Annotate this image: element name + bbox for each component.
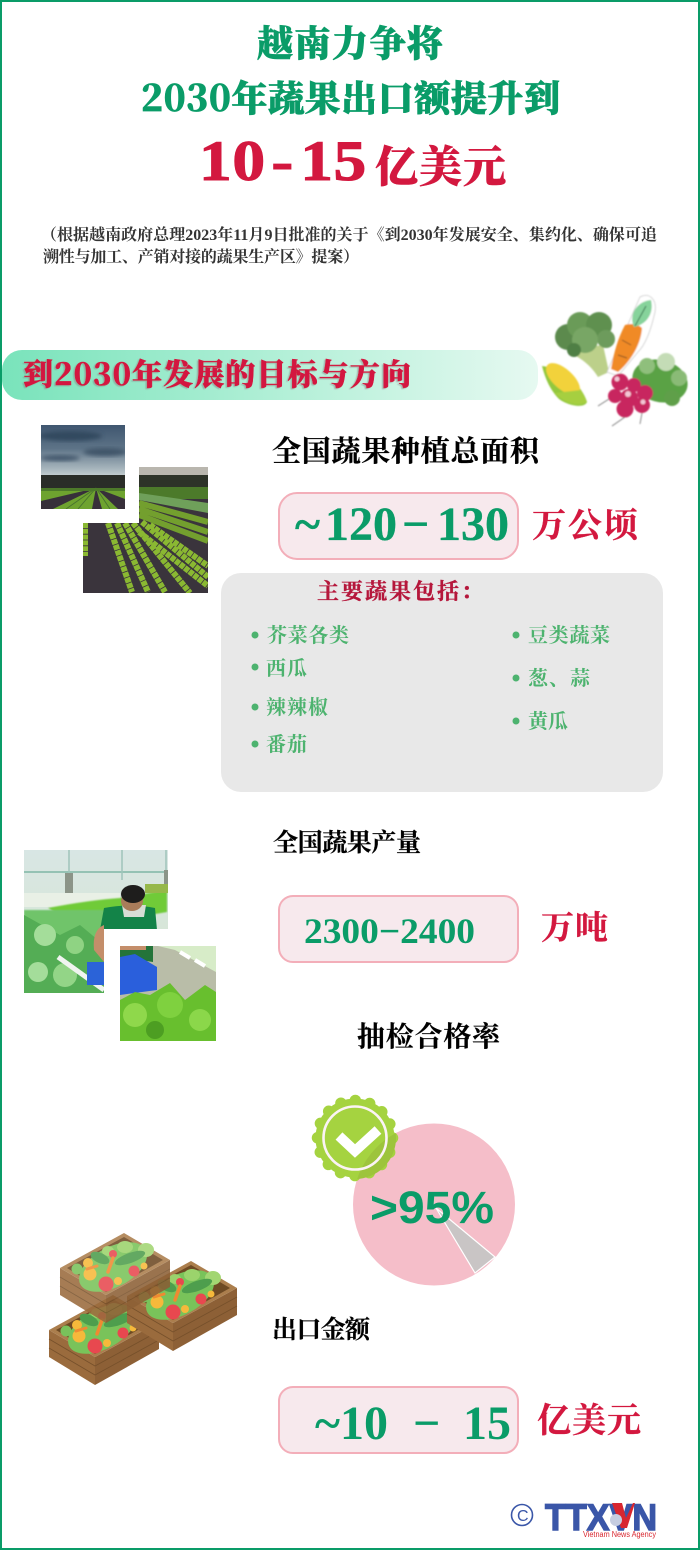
icon: quality badge	[314, 1097, 396, 1179]
heading: total output: 全国蔬果产量	[273, 829, 421, 857]
value box: area	[279, 493, 518, 559]
list: left column: 番茄	[266, 732, 307, 756]
title: 10-15	[199, 130, 366, 193]
logo: TTXVN: TTXVN	[545, 1497, 657, 1538]
list: right column: 葱、蒜	[528, 666, 591, 690]
icon: broccoli	[555, 312, 615, 377]
photo: field with sky	[38, 425, 127, 509]
section banner: 到2030年发展的目标与方向	[23, 350, 411, 394]
title: 越南力争将	[257, 16, 443, 67]
list: right column: 豆类蔬菜	[528, 624, 610, 647]
icon: carrot	[607, 295, 655, 376]
value box: area: 130	[437, 498, 509, 551]
list: right column: 黄瓜	[528, 710, 568, 733]
title	[141, 16, 560, 195]
icon: corn	[541, 358, 587, 406]
heading: export value: 出口金额	[272, 1316, 372, 1344]
icon: radishes	[598, 374, 653, 426]
photo: lettuce and crate	[120, 946, 216, 1041]
logo: TTXVN: C	[517, 1508, 529, 1525]
list: right column	[512, 624, 610, 733]
icon: vegetables	[541, 295, 692, 426]
logo: TTXVN: Vietnam News Agency	[583, 1530, 656, 1539]
source note: 溯性与加工、产销对接的蔬果生产区》提案）	[43, 247, 359, 266]
value box: export: ~10	[315, 1397, 388, 1450]
section banner	[2, 350, 538, 400]
value box: output: 2300−2400	[304, 911, 475, 951]
icon: leafy greens	[628, 353, 692, 409]
icon: produce crates	[49, 1232, 237, 1385]
value box: export: 15	[463, 1397, 511, 1450]
value: >95%	[370, 1182, 494, 1233]
unit: hundred million USD: 亿美元	[537, 1402, 641, 1440]
value box: export	[279, 1387, 518, 1453]
heading: total planting area: 全国蔬果种植总面积	[272, 435, 542, 468]
list: left column: 辣辣椒	[266, 696, 328, 719]
unit: tons: 万吨	[541, 910, 608, 947]
list: left column	[252, 623, 349, 756]
heading: inspection pass rate: 抽检合格率	[357, 1021, 501, 1053]
source note	[41, 225, 657, 266]
photo: greenhouse worker	[24, 850, 168, 993]
source note: （根据越南政府总理2023年11月9日批准的关于《到2030年发展安全、集约化、确保可追	[41, 225, 657, 244]
photo: lettuce field	[83, 467, 208, 593]
panel heading: 主要蔬果包括：	[317, 579, 483, 604]
chart: pass rate pie	[314, 1097, 515, 1286]
list: left column: 芥菜各类	[267, 623, 349, 647]
title: 亿美元	[375, 134, 506, 195]
list: left column: 西瓜	[266, 657, 307, 680]
value box: area: ~	[295, 498, 320, 551]
value box: area: 120	[325, 498, 397, 551]
panel: main vegetables	[221, 573, 663, 792]
value box: output	[279, 896, 518, 962]
value box: area: −	[402, 498, 429, 551]
unit: hectares: 万公顷	[532, 507, 640, 545]
title: 2030年蔬果出口额提升到	[141, 71, 560, 122]
value box: export: −	[413, 1397, 440, 1450]
